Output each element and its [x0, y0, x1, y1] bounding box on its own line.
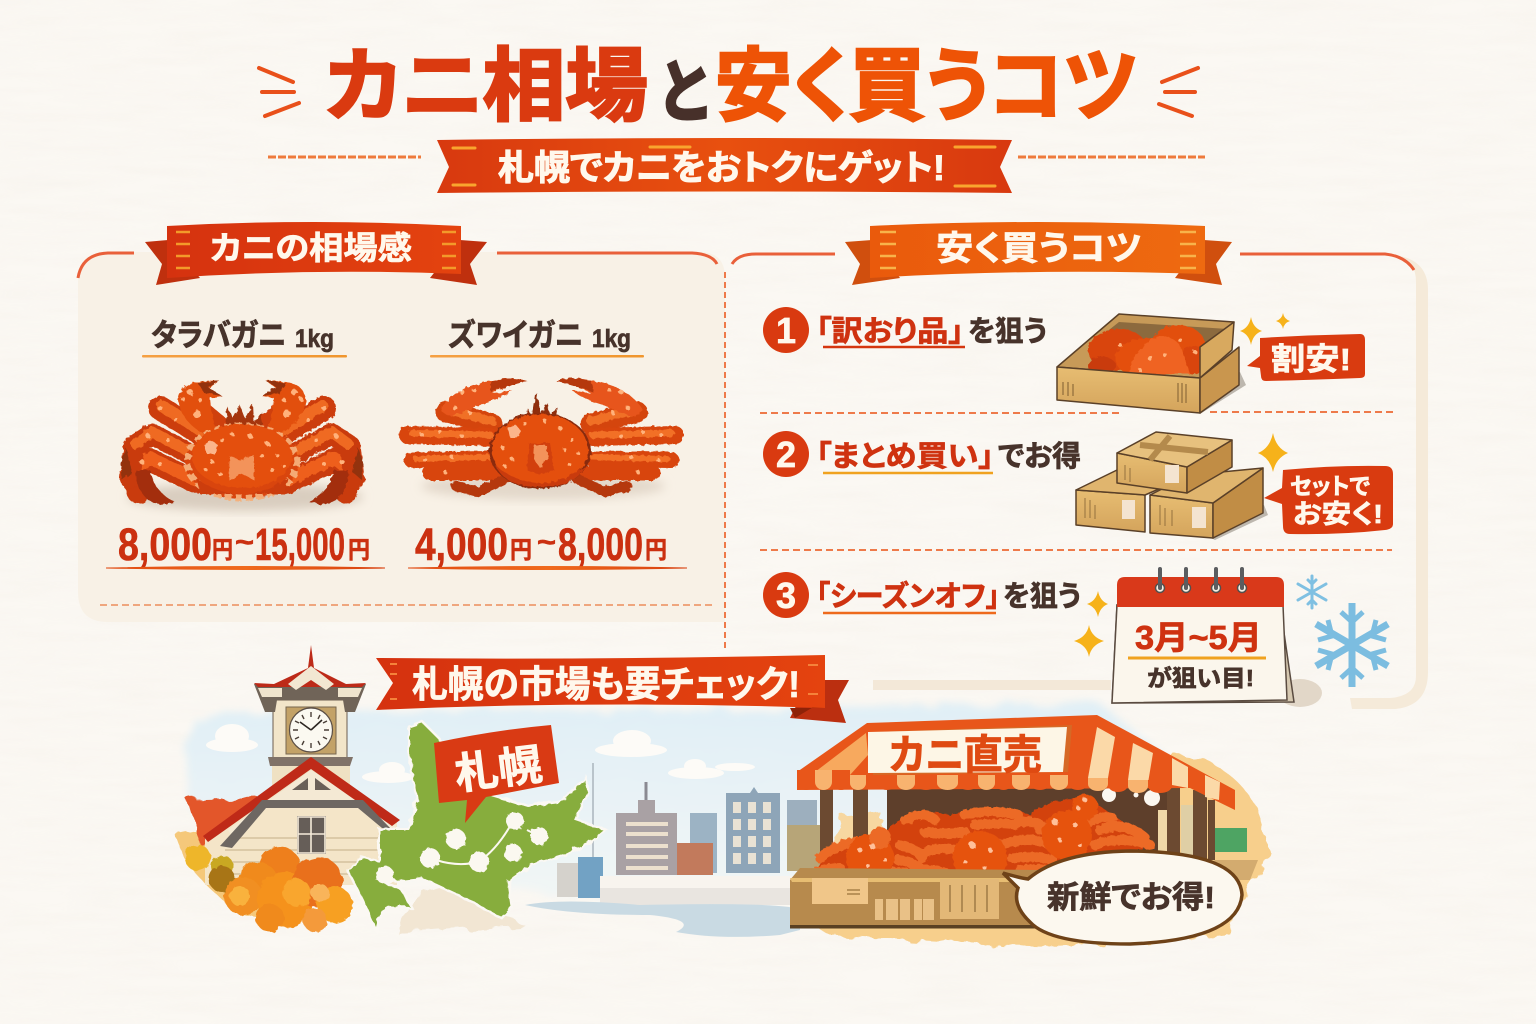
price: タラバガニ: 円 — [348, 537, 370, 564]
subtitle ribbon — [268, 138, 1205, 193]
tip 1: 訳おり品 — [763, 307, 1365, 414]
stall sign — [868, 725, 1072, 778]
number badge 3 — [763, 572, 809, 618]
illustration: sky background — [182, 704, 1170, 900]
panel heading ribbon: カニの相場感: カニの相場感 — [210, 230, 412, 266]
icon: calendar: が狙い目! — [1147, 665, 1254, 691]
label: タラバガニ 1kg: 1kg — [295, 325, 334, 353]
price: タラバガニ: 円 — [212, 537, 233, 564]
price: タラバガニ — [106, 519, 385, 570]
icon: sparkle — [1258, 433, 1288, 472]
icon: ズワイガニ crab — [408, 378, 675, 500]
banner: 札幌の市場も要チェック: 札幌の市場も要チェック! — [412, 664, 800, 705]
label: ズワイガニ 1kg: ズワイガニ — [448, 318, 583, 353]
price: ズワイガニ: 8,000 — [558, 519, 643, 570]
callout: セットでお安く — [1264, 466, 1393, 534]
icon: sparkles — [1074, 591, 1108, 657]
title — [259, 42, 1198, 131]
number badge 3: 3 — [776, 575, 796, 616]
icon: タラバガニ crab — [121, 380, 363, 511]
number badge 1: 1 — [776, 310, 796, 351]
illustration: city skyline — [525, 763, 830, 937]
tip 1 heading — [816, 315, 1047, 348]
tip 3 heading: 「シーズンオフ」 — [816, 579, 1000, 613]
illustration: maple trees — [185, 845, 353, 932]
callout: セットでお安く: セットで — [1290, 473, 1370, 499]
tip 1 heading: を狙う — [968, 315, 1047, 348]
stall sign: カニ直売 — [889, 732, 1042, 778]
price: ズワイガニ: ~ — [537, 526, 556, 559]
panel heading ribbon: カニの相場感 — [145, 222, 487, 285]
label: ズワイガニ 1kg: 1kg — [592, 325, 631, 353]
tip 2 heading: でお得 — [998, 440, 1081, 473]
label: ズワイガニ 1kg — [430, 318, 644, 358]
tip 3 heading — [816, 579, 1081, 613]
price: ズワイガニ — [408, 519, 687, 570]
callout: 新鮮でお得 — [1003, 851, 1242, 944]
title: 安く買うコツ — [715, 42, 1138, 131]
tip 2 heading — [816, 440, 1081, 473]
label: タラバガニ 1kg — [142, 318, 347, 358]
crab pile — [815, 794, 1155, 885]
subtitle ribbon: 札幌でカニをおトクにゲット! — [498, 149, 945, 188]
number badge 2 — [763, 431, 809, 477]
price: ズワイガニ: 円 — [645, 537, 667, 564]
icon: large snowflake — [1316, 603, 1388, 687]
callout: 札幌 map pin — [434, 725, 559, 823]
illustration: autumn wash — [175, 830, 300, 925]
callout: 札幌 map pin: 札幌 — [452, 741, 545, 799]
icon: box of crabs — [1057, 314, 1246, 414]
banner: 札幌の市場も要チェック — [376, 655, 849, 723]
icon: sparkles — [1240, 313, 1290, 345]
icon: stacked boxes — [1076, 432, 1268, 540]
crate — [790, 868, 1050, 928]
callout: セットでお安く: お安く! — [1293, 499, 1383, 529]
icon: clock — [290, 708, 332, 752]
price: ズワイガニ: 4,000 — [415, 519, 508, 570]
price: タラバガニ: 8,000 — [118, 519, 212, 570]
title: カニ相場 — [325, 42, 648, 131]
tip 3: シーズンオフ — [763, 569, 1388, 707]
illustration: market stall — [790, 715, 1268, 946]
callout: 新鮮でお得: 新鮮でお得! — [1047, 880, 1215, 915]
illustration: Hokkaido map — [349, 723, 603, 934]
number badge 1 — [763, 307, 809, 353]
callout: 割安 — [1247, 334, 1365, 381]
tip 2: まとめ買い — [763, 431, 1393, 540]
tip 1 heading: 「訳おり品」 — [816, 315, 964, 348]
panel heading ribbon: 安く買うコツ — [845, 222, 1232, 285]
illustration: Sapporo clock tower — [187, 645, 400, 885]
tip 3 heading: を狙う — [1003, 580, 1081, 613]
icon: small snowflake — [1298, 576, 1326, 608]
stall awning — [797, 715, 1235, 810]
panel: カニの相場感 — [78, 222, 725, 650]
icon: calendar — [1112, 569, 1322, 707]
icon: calendar: 3月~5月 — [1135, 619, 1262, 656]
callout: 割安: 割安! — [1271, 342, 1351, 377]
panel heading ribbon: 安く買うコツ: 安く買うコツ — [936, 230, 1142, 268]
price: タラバガニ: ~ — [235, 526, 254, 559]
tip 2 heading: 「まとめ買い」 — [816, 440, 994, 473]
title: と — [660, 55, 708, 131]
price: タラバガニ: 15,000 — [255, 519, 345, 570]
number badge 2: 2 — [776, 434, 796, 475]
label: タラバガニ 1kg: タラバガニ — [151, 318, 286, 353]
price: ズワイガニ: 円 — [510, 537, 532, 564]
panel: 安く買うコツ — [732, 222, 1428, 709]
